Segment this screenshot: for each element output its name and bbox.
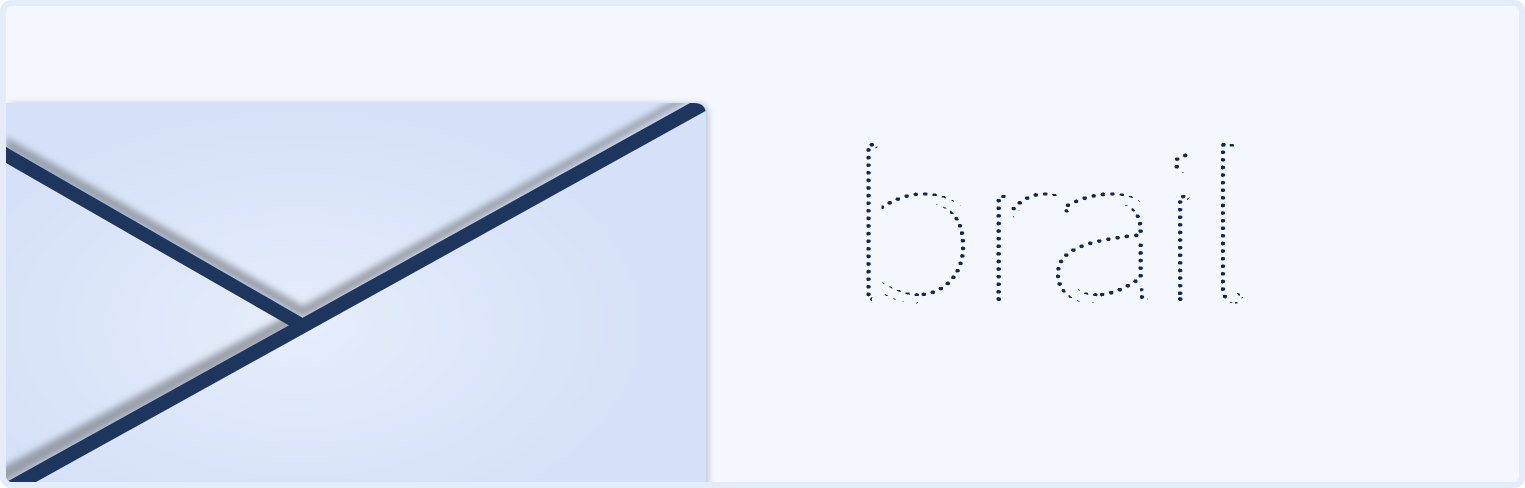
icon: envelope [0, 75, 720, 488]
wordmark: dotted brail: brail [843, 74, 1259, 355]
